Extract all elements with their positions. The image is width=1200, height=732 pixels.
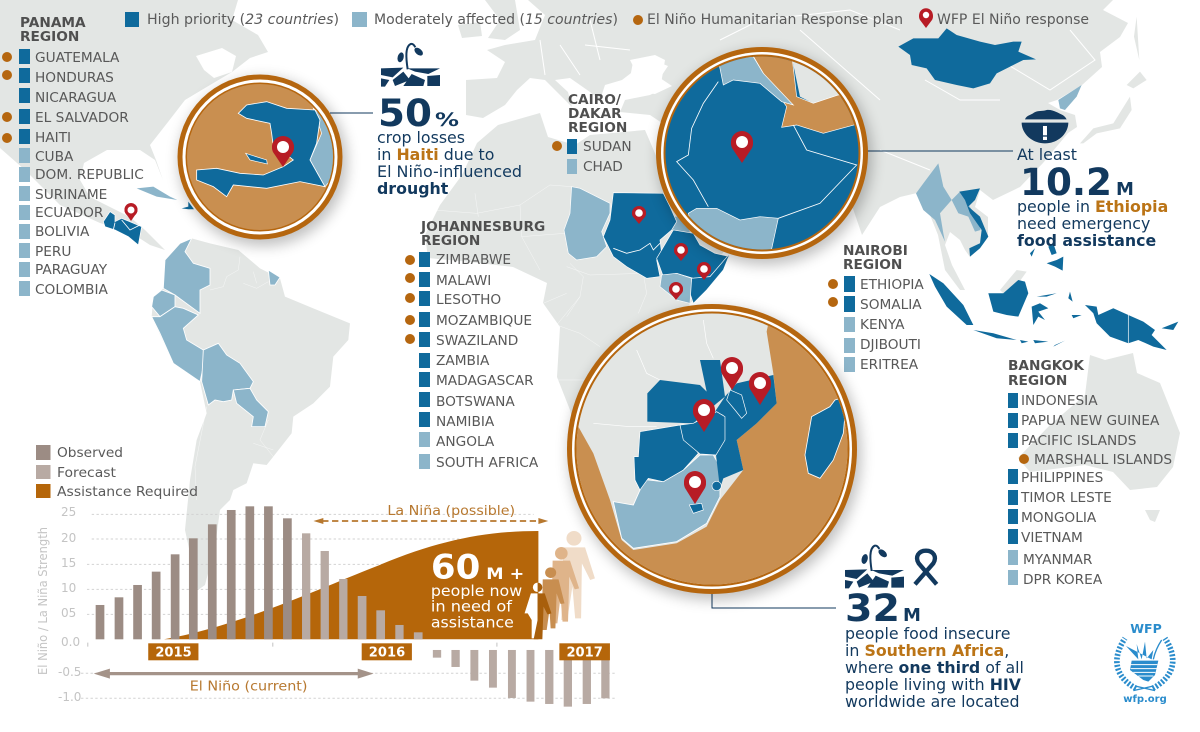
map: country borders — [195, 0, 1095, 500]
stat: 60 million plus: people now — [431, 582, 522, 600]
pin: Ethiopia inset — [731, 131, 753, 163]
Panama country names: PERU — [35, 244, 71, 260]
logo emblem — [1126, 640, 1162, 682]
description: crop losses: crop losses — [377, 128, 465, 147]
map: Haiti — [197, 102, 325, 197]
row: Chad: CHAD — [583, 159, 623, 175]
Johannesburg country names: ZAMBIA — [436, 353, 490, 369]
description: people in Ethiopia: food assistance — [1017, 231, 1156, 250]
heading: Nairobi region: NAIROBI — [843, 243, 908, 259]
map: South Africa — [613, 455, 720, 548]
heading: Cairo/Dakar region: REGION — [568, 120, 627, 136]
high priority squares — [1008, 393, 1018, 544]
high priority squares — [419, 252, 430, 427]
axis ticks — [88, 643, 497, 647]
map: Vietnam — [959, 188, 988, 257]
icon: rice bowl with exclamation mark — [1022, 110, 1068, 143]
legend: high priority: High priority (23 countries) — [147, 12, 339, 28]
map: Mozambique — [715, 375, 777, 488]
map: South American affected countries — [152, 238, 280, 427]
stat unit: % — [435, 109, 459, 131]
Bangkok country names: MYANMAR — [1023, 552, 1093, 568]
legend: humanitarian response plan: El Niño Humanitarian Response plan — [647, 12, 903, 28]
logo wordmark: WFP — [1130, 621, 1162, 636]
icon: wilting plant on cracked soil — [381, 44, 440, 87]
stat: 60 million plus: 60 — [431, 546, 480, 587]
Nairobi country names: DJIBOUTI — [860, 337, 921, 353]
Johannesburg country names: MADAGASCAR — [436, 373, 534, 389]
axis values: 0.0 — [61, 635, 80, 649]
map: Mongolia — [898, 28, 1178, 350]
Panama country names: CUBA — [35, 149, 74, 165]
heading: Bangkok region — [1008, 358, 1085, 389]
map: Gonave island — [246, 153, 267, 164]
Bangkok country names: DPR KOREA — [1023, 572, 1103, 588]
map: Europe and Asia — [466, 0, 1128, 290]
bars: forecast — [302, 533, 610, 707]
panel: Bangkok region list — [1008, 358, 1172, 588]
Nairobi country names: ETHIOPIA — [860, 277, 924, 293]
map: Africa — [425, 113, 730, 520]
arrow: El Niño current — [94, 669, 374, 694]
description: people food insecure: in Southern Africa, — [845, 641, 1009, 660]
stat: 10.2 million: 10.2 — [1020, 161, 1112, 204]
year labels — [148, 643, 610, 660]
map: Namibia and Botswana — [634, 425, 698, 490]
Johannesburg country names: NAMIBIA — [436, 414, 495, 430]
connector lines — [330, 113, 1013, 608]
map: Sumatra and Java — [929, 274, 1065, 347]
Panama country names: PARAGUAY — [35, 262, 108, 278]
callout: Southern Africa — [845, 546, 1024, 711]
heading: Johannesburg region — [420, 219, 545, 249]
map: Red Sea and Gulf brown — [752, 53, 860, 133]
Johannesburg country names: BOTSWANA — [436, 394, 515, 410]
heading: Panama region: REGION — [20, 29, 79, 45]
moderately affected squares — [419, 432, 430, 469]
stat unit: M — [903, 605, 921, 626]
axis title: El Niño / La Niña Strength — [36, 527, 50, 675]
circle: Southern Africa inset — [560, 300, 861, 600]
status squares — [844, 276, 855, 372]
logo url: wfp.org — [1123, 694, 1167, 705]
map: Eritrea — [718, 57, 793, 105]
response plan markers — [828, 279, 838, 307]
map: Cuba — [137, 187, 177, 200]
arrow: La Niña possible: La Niña (possible) — [387, 504, 515, 519]
Johannesburg country names: SOUTH AFRICA — [436, 455, 539, 471]
map: Central America highlighted countries — [103, 187, 194, 245]
map: Ethiopia borders — [677, 82, 857, 218]
panel: Panama region list — [2, 15, 144, 298]
stat: 50 percent: 50 — [378, 92, 432, 135]
map: British Isles — [458, 0, 520, 40]
top legend — [125, 8, 1089, 28]
map: Dominican Republic and Haiti small — [182, 202, 194, 209]
arrow: El Niño current: El Niño (current) — [190, 680, 308, 694]
Bangkok country names: PAPUA NEW GUINEA — [1021, 413, 1160, 429]
legend: forecast: Forecast — [57, 465, 116, 481]
moderately affected squares — [19, 148, 30, 296]
description: people in Ethiopia: people in Ethiopia — [1017, 197, 1168, 216]
Panama country names: SURINAME — [35, 187, 107, 203]
Panama country names: NICARAGUA — [35, 90, 117, 106]
heading: Johannesburg region: REGION — [421, 233, 480, 249]
callout: Haiti crop losses — [377, 44, 522, 198]
stat: 60 million plus — [431, 546, 524, 631]
Bangkok country names: MONGOLIA — [1021, 510, 1097, 526]
year labels: 2016 — [369, 646, 405, 660]
Bangkok country names: PHILIPPINES — [1021, 470, 1103, 486]
map: Myanmar — [916, 163, 952, 242]
stat unit: M — [1116, 179, 1134, 200]
map: Japan — [1000, 17, 1147, 293]
Nairobi country names: ERITREA — [860, 357, 919, 373]
heading: Nairobi region — [843, 243, 908, 273]
map: Laos and Cambodia — [952, 192, 981, 232]
icon: family silhouettes — [525, 531, 595, 639]
Nairobi country names: KENYA — [860, 317, 905, 333]
map: Australia — [1018, 353, 1180, 522]
map: Kenya — [688, 208, 779, 250]
heading: Nairobi region: REGION — [843, 257, 902, 273]
axis values: -1.0 — [58, 690, 81, 704]
Johannesburg country names — [436, 252, 539, 471]
description: people in Ethiopia: need emergency — [1017, 214, 1150, 233]
chart axis labels — [36, 505, 81, 704]
map: South America — [152, 238, 350, 590]
pin: Haiti inset — [272, 136, 294, 167]
grid lines — [81, 514, 617, 698]
Bangkok country names: VIETNAM — [1021, 530, 1083, 546]
description: crop losses: in Haiti due to — [377, 145, 494, 164]
map: Madagascar — [805, 397, 847, 478]
panel: Johannesburg region list — [405, 219, 545, 471]
axis values: 05 — [61, 606, 76, 620]
map: world base — [0, 0, 1180, 590]
stat: 60 million plus: assistance — [431, 614, 514, 631]
moderately affected squares — [1008, 550, 1018, 585]
heading: Panama region: PANAMA — [20, 15, 86, 31]
Johannesburg country names: MALAWI — [436, 273, 491, 289]
chart legend — [36, 445, 198, 500]
map: Sulawesi and Moluccas — [1032, 292, 1082, 325]
Nairobi country names — [860, 277, 924, 373]
map: Borneo — [988, 280, 1028, 317]
Johannesburg country names: ANGOLA — [436, 434, 495, 450]
panel: Cairo/Dakar region list — [552, 92, 632, 175]
icon: HIV ribbon — [915, 551, 937, 584]
description: people food insecure — [845, 624, 1024, 711]
map: Philippines — [1030, 243, 1063, 271]
description: crop losses: drought — [377, 179, 449, 198]
map: Swaziland — [712, 481, 721, 491]
callout: Ethiopia food assistance — [1017, 110, 1168, 250]
map: Hudson Bay — [196, 48, 236, 78]
Bangkok country names: MARSHALL ISLANDS — [1034, 452, 1172, 468]
axis values — [58, 505, 81, 704]
axis values: 15 — [61, 556, 76, 570]
heading: Cairo/Dakar region — [568, 92, 627, 136]
heading: Bangkok region: REGION — [1008, 373, 1067, 389]
Panama country names: HAITI — [35, 130, 71, 146]
response plan markers — [2, 52, 12, 143]
Bangkok country names — [1020, 393, 1172, 588]
icon: wilting plant on cracked soil — [845, 546, 904, 588]
bars: observed — [96, 506, 292, 639]
description: people food insecure: people living with HIV — [845, 675, 1022, 694]
Panama country names: BOLIVIA — [35, 224, 90, 240]
Panama country names: HONDURAS — [35, 70, 114, 86]
stat: 32 million: 32 — [845, 587, 900, 630]
description: crop losses — [377, 128, 522, 198]
map: Zambia — [647, 360, 725, 423]
heading: Johannesburg region: JOHANNESBURG — [420, 219, 545, 235]
map: Indian Ocean and Atlantic — [576, 326, 848, 584]
map: inner borders — [593, 320, 713, 427]
axis values: -0.5 — [58, 665, 81, 679]
logo: WFP — [1117, 621, 1173, 705]
stat: 60 million plus: M + — [486, 565, 524, 584]
panel: Nairobi region list — [828, 243, 924, 373]
heading: Cairo/Dakar region: CAIRO/ — [568, 92, 621, 108]
map: Dominican Republic in Haiti inset — [310, 108, 333, 188]
Panama country names: ECUADOR — [35, 205, 104, 221]
description: people in Ethiopia — [1017, 197, 1168, 250]
arrow: La Niña possible — [313, 504, 548, 524]
Bangkok country names: INDONESIA — [1021, 393, 1098, 409]
text: at least: At least — [1017, 145, 1077, 164]
axis values: 10 — [61, 581, 76, 595]
map: Malawi — [727, 390, 747, 418]
stat: 60 million plus: in need of — [431, 598, 513, 615]
response plan marker — [1019, 454, 1029, 464]
Johannesburg country names: LESOTHO — [436, 292, 501, 308]
circle: Haiti inset — [178, 74, 347, 246]
Panama country names: EL SALVADOR — [35, 110, 129, 126]
Johannesburg country names: MOZAMBIQUE — [436, 313, 532, 329]
heading: Cairo/Dakar region: DAKAR — [568, 106, 622, 122]
high priority squares — [19, 49, 30, 144]
Panama country names: COLOMBIA — [35, 282, 108, 298]
map: North America — [0, 0, 268, 250]
Bangkok country names: PACIFIC ISLANDS — [1021, 433, 1136, 449]
Panama country names: GUATEMALA — [35, 50, 120, 66]
Bangkok country names: TIMOR LESTE — [1020, 490, 1112, 506]
heading: Bangkok region: BANGKOK — [1008, 358, 1085, 374]
area: assistance required — [164, 531, 538, 639]
heading: Panama region — [20, 15, 86, 45]
pin: Central America — [124, 203, 138, 221]
Nairobi country names: SOMALIA — [860, 297, 922, 313]
pins: Southern Africa inset — [684, 357, 771, 504]
axis values: 25 — [61, 505, 76, 519]
Panama country names — [35, 50, 144, 298]
response plan markers — [405, 255, 415, 344]
circle: Ethiopia inset — [650, 40, 872, 265]
description: crop losses: El Niño-influenced — [377, 162, 522, 181]
map: Lesotho — [689, 503, 703, 513]
year labels: 2015 — [155, 646, 192, 660]
map: Zimbabwe — [680, 412, 725, 455]
legend: observed: Observed — [57, 445, 123, 461]
chart: El Niño / La Niña strength and assistance required — [81, 504, 617, 707]
map: Black Sea — [630, 58, 672, 94]
pins: East Africa small — [632, 206, 711, 300]
legend: assistance required: Assistance Required — [57, 484, 198, 500]
legend: WFP response pin: WFP El Niño response — [937, 12, 1089, 28]
description: people food insecure: where one third of all — [845, 658, 1024, 677]
logo wreath — [1117, 638, 1173, 691]
year labels: 2017 — [566, 646, 603, 660]
Johannesburg country names: SWAZILAND — [436, 333, 518, 349]
map: East African highlighted countries — [564, 187, 730, 303]
description: people food insecure: people food insecure — [845, 624, 1010, 643]
map: Arabia grey — [792, 62, 841, 103]
axis values: 20 — [61, 531, 76, 545]
map: New Guinea — [1085, 305, 1178, 350]
Panama country names: DOM. REPUBLIC — [35, 167, 144, 183]
description: people food insecure: worldwide are located — [845, 692, 1020, 711]
map: DPR Korea — [1058, 85, 1082, 110]
Johannesburg country names: ZIMBABWE — [436, 252, 511, 268]
row: Sudan: SUDAN — [583, 139, 632, 155]
legend: moderately affected: Moderately affected (15 countries) — [374, 12, 618, 28]
